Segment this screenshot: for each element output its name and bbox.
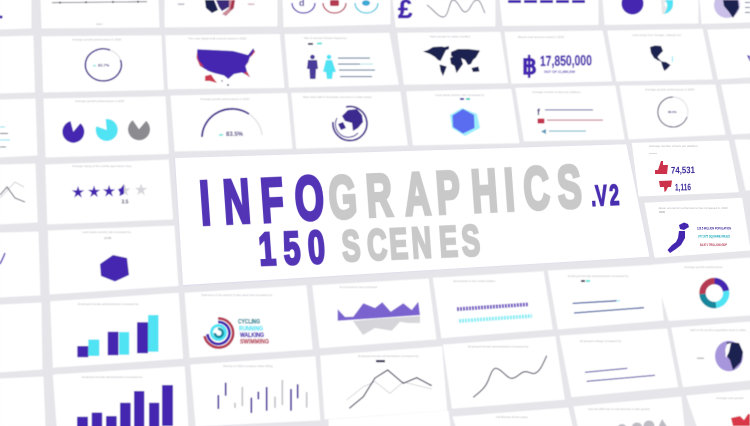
dislike count: 1,116 <box>675 182 691 193</box>
card: ring 88% <box>620 85 725 139</box>
card: people bars <box>285 33 398 87</box>
icon: thumb down <box>659 180 672 192</box>
card: grouped bars <box>51 293 183 367</box>
card: two thin lines: Employed college increased by <box>580 339 622 343</box>
legend: CYCLING <box>238 318 260 326</box>
legend: WALKING <box>240 332 264 339</box>
card: top pies <box>603 0 698 24</box>
card: row 1 right edge <box>708 29 750 79</box>
card: people bars: Men & women fitness frequency <box>304 36 347 40</box>
card: star rating: Average rating of the mobile app before drop <box>72 164 132 168</box>
card: thumbs: Average number of fans per platform <box>649 144 698 148</box>
card: bottom shapes <box>574 397 684 426</box>
card: radar hexagon <box>407 89 519 145</box>
icon: twitter ring <box>355 0 378 13</box>
card: bottom red map <box>687 390 750 426</box>
hexagon radar <box>450 108 480 136</box>
card: Japan map <box>645 198 750 257</box>
card: purple bars <box>53 367 188 426</box>
card: smooth curve: Employed female administration increased by <box>468 344 529 348</box>
card: top globe: label <box>248 2 255 6</box>
card: two line chart <box>321 347 447 419</box>
card: two line bars <box>548 265 663 329</box>
card: globe ring <box>292 92 407 148</box>
card: purple hexagon: 13.3% <box>104 236 112 240</box>
card: pound sign and curve <box>393 0 495 27</box>
card: Japan map: Japan economic performance has increased in 2020 <box>658 206 728 210</box>
line chart <box>0 182 25 202</box>
card: row 4 left edge <box>0 232 40 297</box>
cyan pictogram row <box>459 316 532 321</box>
legend <box>238 318 269 346</box>
card: ring 82.7% <box>42 36 164 92</box>
legend: SWIMMING <box>240 338 269 346</box>
row: youtube <box>538 118 603 124</box>
card: globe: Half of the world's population lives in cities <box>690 328 747 332</box>
icon: woman <box>323 55 336 79</box>
line chart <box>347 370 432 408</box>
stats: $4.971 TRILLION GDP <box>700 243 728 247</box>
card: top globe: label <box>178 2 185 6</box>
card: area chart <box>313 279 436 348</box>
card: candlesticks <box>191 357 320 426</box>
card: globe <box>672 322 750 387</box>
map: USA <box>197 48 255 86</box>
stars: ★ <box>134 182 148 199</box>
card: bottom shapes: Use the 80% bar of null services in fast growth <box>588 407 650 411</box>
stars: ★ <box>117 183 131 200</box>
card: three pies <box>44 97 168 157</box>
bars <box>585 368 655 381</box>
icon: youtube ring <box>323 0 346 13</box>
card: ring 82.7%: Average growth performance in 2020 <box>72 38 122 42</box>
card: star rating <box>46 160 173 224</box>
globe icon <box>333 107 367 141</box>
title: INFOGRAPHICS: INFOGRAPHICS <box>198 151 584 238</box>
card: social bars <box>516 86 624 141</box>
card: gauge 83.5%: Average growth performance in 2020 <box>200 97 250 101</box>
map: world <box>423 46 480 76</box>
row: telegram <box>541 129 586 134</box>
hexagon <box>100 255 129 282</box>
card: two thin lines <box>560 329 678 397</box>
card: radar hexagon: Land waste activity rate increased by <box>435 93 485 97</box>
main title card <box>174 144 650 286</box>
radial chart <box>204 318 233 348</box>
card: smooth curve <box>443 337 564 408</box>
stars <box>71 182 148 202</box>
pie: grey <box>128 120 150 140</box>
card: bottom fragment text: Fat Brands all the years <box>496 415 528 419</box>
card: purple blocks <box>500 0 598 26</box>
donut chart <box>702 281 726 305</box>
pie: purple <box>62 121 84 143</box>
card: USA map: The most highly built schools based in 2020 <box>188 36 247 40</box>
bar chart <box>77 385 173 426</box>
subtitle: SCENES: SCENES <box>340 216 482 271</box>
area chart <box>338 302 420 335</box>
card: right edge fragments <box>735 140 750 190</box>
card: row 6 left edge <box>0 377 45 426</box>
ring chart: 88.5% <box>668 110 677 114</box>
card: purple hexagon: Land waste activity rate increased by <box>82 230 132 234</box>
stars: ★ <box>102 183 116 200</box>
card: purple hexagon <box>48 226 178 294</box>
curve <box>473 356 547 397</box>
card: bitcoin count: OUT OF 21,000,000 <box>544 70 575 74</box>
card: USA map <box>166 34 284 89</box>
icon: man <box>307 55 318 79</box>
gauge arc: 83.5% <box>226 132 244 138</box>
card: row 5 left edge <box>0 303 42 372</box>
card: Americas map: Land study from Google, Latitude Inc <box>632 33 682 37</box>
card: area chart: E-Commerce has increased <box>340 285 378 289</box>
card: bottom fragment <box>329 411 450 426</box>
card: grouped bars: Employed female administration increased by <box>78 302 139 306</box>
card: bottom fragment text <box>453 408 572 426</box>
title: .V2: .V2 <box>590 179 620 213</box>
bars <box>573 301 644 313</box>
card: social media rings <box>283 0 390 27</box>
row: facebook: f <box>537 107 541 117</box>
card: row 1 left edge <box>0 36 34 93</box>
map: Americas <box>650 46 670 71</box>
stars: ★ <box>71 184 85 202</box>
card: world map: Most people by nation studied <box>430 34 470 38</box>
bars <box>338 58 375 77</box>
stats: 126.5 MILLION POPULATION <box>697 226 731 230</box>
pie: cyan <box>96 119 118 141</box>
ring chart: 82.7% <box>98 62 110 68</box>
card: purple bars: Employed female administration increased by <box>82 375 143 379</box>
stats: 377,975 SQUARE MILES <box>698 234 731 238</box>
card: top globe <box>165 0 277 27</box>
card: gauge 83.5% <box>171 94 292 151</box>
globe <box>697 341 743 371</box>
subtitle: 150: 150 <box>257 223 327 276</box>
card: top right globe <box>700 0 750 24</box>
card: people rows: Secretaries in the United States <box>453 279 496 283</box>
card: candlesticks: Storing of 2020 company share fitting <box>223 364 273 368</box>
card: timeline: label <box>96 22 103 26</box>
card: bitcoin count <box>505 31 612 83</box>
card: row 2 right edge <box>722 84 750 134</box>
card: bitcoin count: Bitcoin total amount mined in 2020 <box>518 35 564 39</box>
card: two line chart: Employed female administration increased by <box>358 354 419 358</box>
card: donut <box>653 258 750 320</box>
rating value: 3.5 <box>122 200 129 206</box>
card: timeline <box>41 0 159 28</box>
candlestick chart <box>218 380 307 413</box>
card: globe ring: More than half of humanity now lives in urban areas <box>303 95 372 99</box>
card: bottom red map: Average user growth <box>716 396 744 400</box>
card: two line bars: Employed female administration increased by <box>568 274 629 278</box>
bar chart <box>77 315 158 357</box>
card: donut: Average growth performance <box>684 265 723 269</box>
like count: 74,531 <box>671 165 696 176</box>
card: row 2 left edge <box>0 99 37 157</box>
legend: RUNNING <box>239 325 263 332</box>
stats <box>697 226 731 247</box>
stars: ★ <box>87 184 101 201</box>
card: top row fragment 0 <box>0 0 31 29</box>
card: thumbs <box>632 141 738 196</box>
card: ring 88%: Average growth performance in 2020 <box>645 88 695 92</box>
map: Japan <box>668 222 689 253</box>
icon: baht sign: ฿ <box>522 53 537 80</box>
card: activity rings: Total time of the activity of last week has increased by <box>201 293 273 297</box>
big number: 17,850,000 <box>540 53 592 70</box>
icon: thumb up <box>655 161 668 174</box>
card: three pies: Average growth performance in 2020 <box>75 99 125 103</box>
card: Americas map <box>608 29 712 81</box>
card: row 3 left line chart <box>0 164 37 224</box>
card: people rows <box>433 272 552 338</box>
card: world map <box>398 32 508 84</box>
card: activity rings <box>185 286 312 357</box>
card: social bars: Average number of fans per platform <box>532 90 581 94</box>
purple pictogram row <box>457 304 528 309</box>
